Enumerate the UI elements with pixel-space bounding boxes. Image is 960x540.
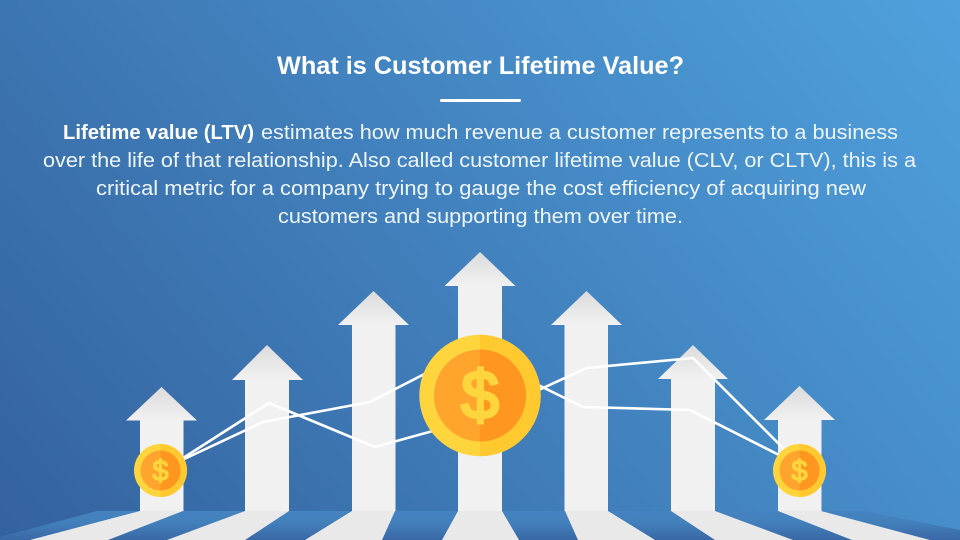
icon: large center coin: $ — [461, 358, 499, 434]
arrow 7 — [764, 386, 835, 511]
title underline — [440, 99, 521, 102]
icon: large center coin — [419, 335, 541, 456]
trend lines — [180, 358, 785, 461]
arrow shadows on floor — [30, 511, 930, 540]
arrow 2 — [232, 345, 303, 511]
icon: left small coin — [134, 444, 187, 497]
arrow 4 — [444, 252, 516, 511]
title: What is Customer Lifetime Value? — [277, 52, 684, 80]
arrow 5 — [551, 291, 622, 511]
description line 1: estimates how much revenue a customer represents to a business — [261, 122, 898, 144]
arrow 3 — [338, 291, 409, 511]
arrow 6 — [658, 345, 728, 511]
icon: left small coin: $ — [152, 456, 169, 488]
description line 3: critical metric for a company trying to gauge the cost efficiency of acquiring new — [96, 178, 867, 200]
icon: right small coin: $ — [791, 456, 808, 488]
floor — [0, 511, 960, 540]
description line 1: Lifetime value (LTV) — [63, 122, 254, 144]
description line 2: over the life of that relationship. Also called customer lifetime value (CLV, or CLTV), this is a — [43, 150, 917, 172]
arrow 1 — [126, 387, 197, 511]
description line 4: customers and supporting them over time. — [278, 206, 683, 228]
icon: right small coin — [773, 444, 826, 497]
description text — [43, 122, 917, 228]
